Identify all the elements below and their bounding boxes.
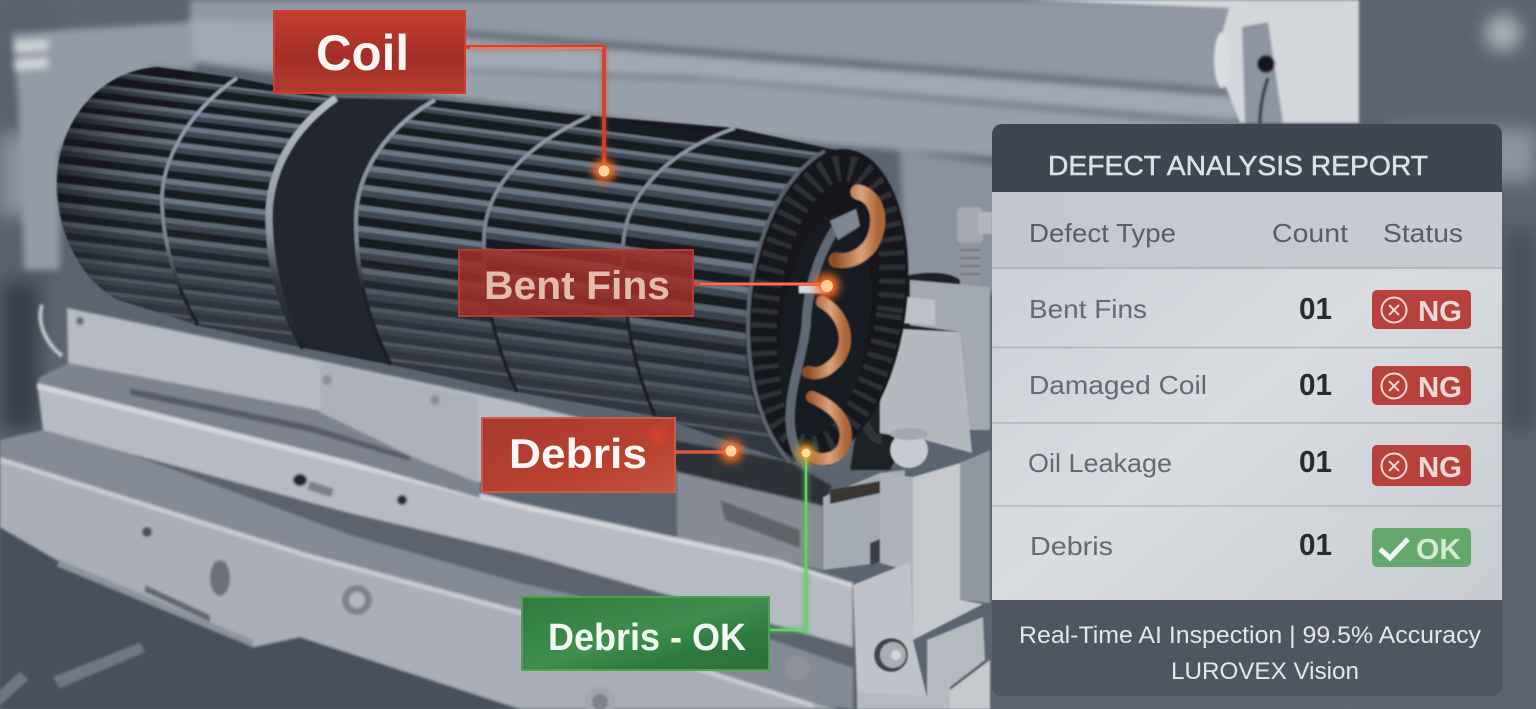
- row: Bent Fins: [1029, 290, 1471, 329]
- row: Debris: 01: [1299, 527, 1332, 562]
- fin section: left end: [56, 66, 234, 324]
- rail B face: [0, 457, 840, 709]
- grey strap: [790, 228, 836, 466]
- dot: Debris: [720, 440, 742, 462]
- fin section: second: [163, 78, 330, 348]
- recess strip: [37, 363, 480, 498]
- callout: Bent Fins: [459, 250, 693, 316]
- row: Oil Leakage: Oil Leakage: [1028, 448, 1172, 478]
- table body: [992, 192, 1502, 600]
- fan rings: [162, 78, 735, 416]
- callout: Coil: Coil: [316, 25, 409, 81]
- fin section: fourth: [485, 115, 731, 416]
- row: Damaged Coil: Damaged Coil: [1029, 370, 1207, 400]
- row: Oil Leakage: 01: [1299, 444, 1332, 479]
- table column headers: [1029, 218, 1463, 248]
- callout: Debris: Debris: [509, 430, 647, 477]
- callout: Debris - OK: [522, 597, 769, 670]
- dot: Debris OK: [797, 444, 815, 462]
- table column headers: Status: [1383, 218, 1463, 248]
- callout: Debris - OK: Debris - OK: [548, 617, 747, 659]
- gap between rails: [0, 430, 853, 709]
- disc rim highlight: [748, 151, 825, 462]
- bolt: [957, 207, 992, 285]
- callout: Coil: [274, 11, 465, 93]
- front bracket: [823, 428, 990, 709]
- leader: Debris: [676, 450, 731, 454]
- leader: Debris OK: [770, 455, 806, 630]
- panel footer: Real-Time AI Inspection | 99.5% Accuracy: [1019, 622, 1481, 649]
- dot: Bent Fins: [815, 274, 839, 298]
- panel header: [992, 124, 1502, 192]
- blower fan cylinder: [56, 66, 836, 466]
- copper hooks: [836, 192, 878, 260]
- panel footer: [992, 600, 1502, 696]
- panel header: DEFECT ANALYSIS REPORT: [1048, 150, 1428, 181]
- glowing target dots: [593, 160, 839, 462]
- rear housing plates: [190, 0, 1240, 90]
- callout: Debris: [482, 418, 675, 492]
- row: Oil Leakage: NG: [1418, 452, 1462, 484]
- row: Debris: Debris: [1030, 531, 1113, 561]
- row: Oil Leakage: [1028, 444, 1471, 486]
- motor housing and right bracket behind disc: [850, 207, 992, 470]
- fan end disc with copper coil: [727, 139, 927, 471]
- row: Debris: [1030, 527, 1471, 567]
- table column headers: Count: [1272, 218, 1349, 248]
- row: Bent Fins: 01: [1299, 291, 1332, 326]
- leader: Bent Fins: [694, 282, 827, 286]
- rail A: [37, 383, 853, 647]
- table column headers: Defect Type: [1029, 218, 1176, 248]
- upper plate: [67, 308, 700, 482]
- top right white bracket: [1023, 0, 1359, 123]
- textured plate: [677, 466, 823, 570]
- callout leader lines: [466, 47, 827, 630]
- holes and screws: [76, 317, 84, 325]
- row: Damaged Coil: [1029, 366, 1471, 405]
- left bracket: [12, 22, 195, 270]
- panel: defect analysis report: [992, 124, 1502, 696]
- fin section: fifth: [624, 127, 836, 466]
- row: Debris: OK: [1416, 534, 1461, 566]
- row: Damaged Coil: NG: [1418, 372, 1462, 404]
- machine rails: [0, 305, 853, 709]
- dot: Coil: [593, 160, 615, 182]
- lower dark floor: [0, 500, 830, 709]
- central collar: [269, 98, 435, 365]
- callout: Bent Fins: Bent Fins: [484, 264, 670, 308]
- row: Bent Fins: NG: [1418, 296, 1462, 328]
- leader: Coil: [466, 47, 604, 170]
- row: Bent Fins: Bent Fins: [1029, 294, 1147, 324]
- panel footer: LUROVEX Vision: [1171, 658, 1359, 685]
- fin section: third: [358, 99, 586, 392]
- row: Damaged Coil: 01: [1299, 367, 1332, 402]
